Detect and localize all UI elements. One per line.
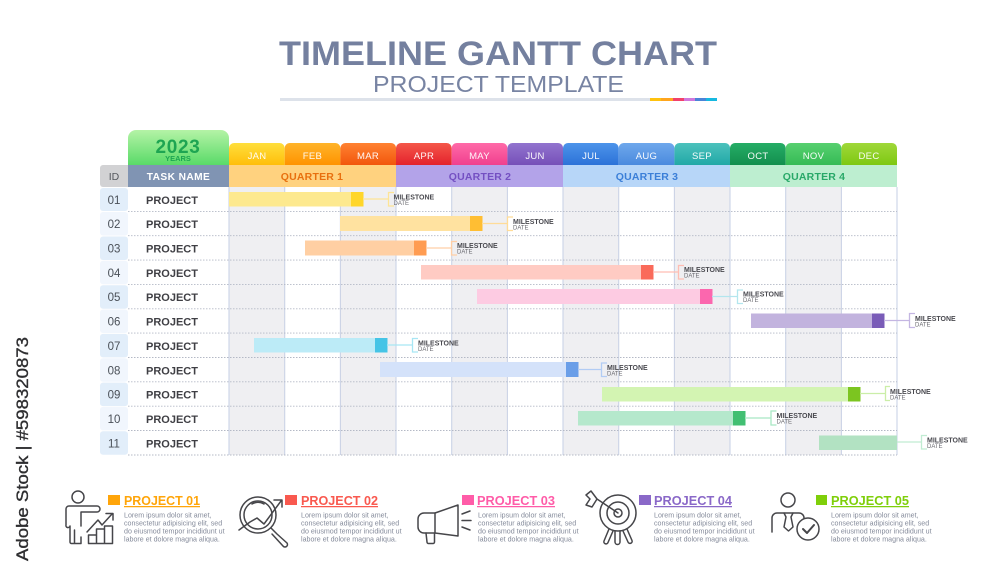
gantt row 07: MILESTONE — [418, 340, 459, 348]
legend: project 04: Lorem ipsum dolor sit amet, — [654, 512, 742, 520]
gantt row 04: MILESTONE — [684, 267, 725, 274]
legend: project 04 — [639, 494, 755, 544]
ID column header — [100, 165, 128, 187]
task names: PROJECT — [146, 366, 198, 378]
legend: project 05: PROJECT 05 — [831, 494, 909, 508]
legend: project 03: PROJECT 03 — [477, 494, 555, 508]
gantt row 04 — [421, 265, 725, 280]
ID cells: 03 — [108, 244, 120, 256]
ID cells: 07 — [108, 341, 120, 353]
legend: project 01 — [108, 494, 225, 544]
gantt row 08 — [380, 362, 648, 378]
ID cells — [100, 188, 128, 455]
gantt row 09: DATE — [890, 396, 906, 402]
column grid lines — [229, 187, 897, 455]
ID cells: 10 — [108, 414, 120, 426]
task name header: TASK NAME — [147, 172, 210, 183]
icon: megaphone — [418, 505, 471, 544]
legend: project 01: Lorem ipsum dolor sit amet, — [124, 512, 212, 520]
legend: project 05: Lorem ipsum dolor sit amet, — [831, 512, 919, 520]
legend: project 01: labore et dolore magna aliqua. — [124, 536, 220, 544]
legend: project 04: labore et dolore magna aliqua. — [654, 536, 750, 544]
month header tabs: SEP — [692, 151, 712, 162]
legend: project 05: consectetur adipisicing elit, sed — [831, 520, 929, 528]
icon: magnifier with trend — [239, 497, 288, 547]
gantt row 01 — [229, 192, 435, 207]
month header tabs: FEB — [303, 151, 322, 162]
month header tabs: JAN — [248, 151, 266, 162]
ID cells: 04 — [108, 268, 121, 280]
year header: 2023 — [155, 137, 201, 158]
stock credit: Adobe Stock | #598320873 — [14, 337, 32, 561]
gantt row 05 — [477, 289, 784, 304]
legend: project 05: labore et dolore magna aliqua. — [831, 536, 927, 544]
legend: project 01: consectetur adipisicing elit, sed — [124, 520, 222, 528]
gantt row 06 — [751, 314, 956, 328]
quarter band: QUARTER 1 — [281, 171, 343, 183]
gantt row 10: DATE — [776, 420, 792, 426]
ID cells: 08 — [108, 366, 120, 378]
month header tabs: AUG — [636, 151, 657, 162]
gantt row 03: MILESTONE — [457, 243, 498, 250]
quarter band: QUARTER 3 — [616, 171, 678, 183]
icon: presenter with chart — [66, 491, 113, 544]
shaded month columns — [229, 187, 841, 455]
task names: PROJECT — [146, 292, 198, 304]
legend: project 02: do eiusmod tempor incididunt ut — [301, 528, 402, 536]
legend: project 04: do eiusmod tempor incididunt ut — [654, 528, 755, 536]
gantt row 07: DATE — [418, 347, 434, 353]
ID cells: 11 — [108, 438, 120, 450]
legend: project 04: consectetur adipisicing elit, sed — [654, 520, 752, 528]
icon: person with check — [772, 493, 819, 540]
ID cells: 06 — [108, 316, 120, 328]
month header tabs: NOV — [803, 151, 825, 162]
gantt row 05: DATE — [743, 298, 759, 304]
task names — [146, 195, 198, 450]
quarter band: QUARTER 4 — [783, 171, 845, 183]
ID cells: 05 — [108, 292, 120, 304]
legend: project 02: Lorem ipsum dolor sit amet, — [301, 512, 389, 520]
month header tabs: MAY — [469, 151, 490, 162]
legend: project 01: PROJECT 01 — [124, 494, 200, 508]
year header: YEARS — [165, 154, 191, 163]
task names: PROJECT — [146, 341, 198, 353]
gantt row 04: DATE — [684, 274, 700, 280]
gantt row 08: MILESTONE — [607, 365, 648, 372]
gantt row 08: DATE — [607, 372, 623, 378]
task names: PROJECT — [146, 244, 198, 256]
legend: project 02: PROJECT 02 — [301, 494, 378, 508]
gantt row 10: MILESTONE — [776, 413, 818, 420]
ID cells: 02 — [108, 219, 120, 231]
task names: PROJECT — [146, 414, 198, 426]
gantt row 01: DATE — [394, 201, 409, 207]
gantt row 03: DATE — [457, 250, 473, 256]
gantt row 11 — [819, 436, 968, 450]
gantt row 01: MILESTONE — [394, 194, 435, 202]
legend: project 02: consectetur adipisicing elit, sed — [301, 520, 399, 528]
legend: project 03: consectetur adipisicing elit, sed — [478, 520, 576, 528]
month header tabs: OCT — [748, 151, 768, 162]
gantt row 02 — [340, 216, 554, 232]
gantt row 10 — [578, 411, 818, 426]
task name header — [128, 165, 229, 187]
month header tabs: JUL — [582, 151, 600, 162]
gantt row 06: MILESTONE — [915, 316, 956, 323]
task names: PROJECT — [146, 316, 198, 328]
legend: project 02: labore et dolore magna aliqua. — [301, 536, 397, 544]
legend: project 01: do eiusmod tempor incididunt ut — [124, 528, 225, 536]
gantt row 09 — [602, 386, 931, 402]
task names: PROJECT — [146, 268, 198, 280]
subtitle: PROJECT TEMPLATE — [373, 71, 624, 97]
title rule with colour accents — [280, 98, 717, 101]
month header tabs: APR — [414, 151, 434, 162]
task names: PROJECT — [146, 195, 198, 207]
legend: project 03 — [462, 494, 579, 544]
ID cells: 01 — [108, 195, 120, 207]
month header tabs: JUN — [525, 151, 545, 162]
legend: project 03: Lorem ipsum dolor sit amet, — [478, 512, 566, 520]
gantt row 06: DATE — [915, 322, 931, 328]
legend: project 02 — [285, 494, 402, 544]
gantt row 11: DATE — [927, 444, 943, 450]
task names: PROJECT — [146, 438, 198, 450]
ID column header: ID — [109, 171, 120, 183]
ID cells: 09 — [108, 390, 120, 402]
task names: PROJECT — [146, 219, 198, 231]
legend: project 04: PROJECT 04 — [654, 494, 732, 508]
gantt row 03 — [305, 240, 498, 256]
legend: project 05: do eiusmod tempor incididunt ut — [831, 528, 932, 536]
gantt row 02: MILESTONE — [513, 219, 554, 226]
month header tabs: MAR — [357, 151, 379, 162]
year header — [128, 130, 229, 165]
legend: project 05 — [816, 494, 932, 544]
gantt row 11: MILESTONE — [927, 438, 968, 444]
row dotted lines — [128, 211, 897, 455]
legend: project 03: do eiusmod tempor incididunt ut — [478, 528, 579, 536]
gantt row 07 — [254, 338, 459, 353]
title: TIMELINE GANTT CHART — [279, 35, 717, 73]
legend: project 03: labore et dolore magna aliqua. — [478, 536, 574, 544]
gantt row 09: MILESTONE — [890, 389, 931, 396]
task names: PROJECT — [146, 390, 198, 402]
month header tabs: DEC — [859, 151, 879, 162]
gantt row 02: DATE — [513, 226, 529, 232]
gantt row 05: MILESTONE — [743, 292, 784, 298]
month header tabs — [229, 143, 897, 165]
icon: target with arrow — [586, 491, 636, 544]
quarter band — [229, 165, 897, 187]
quarter band: QUARTER 2 — [449, 171, 511, 183]
